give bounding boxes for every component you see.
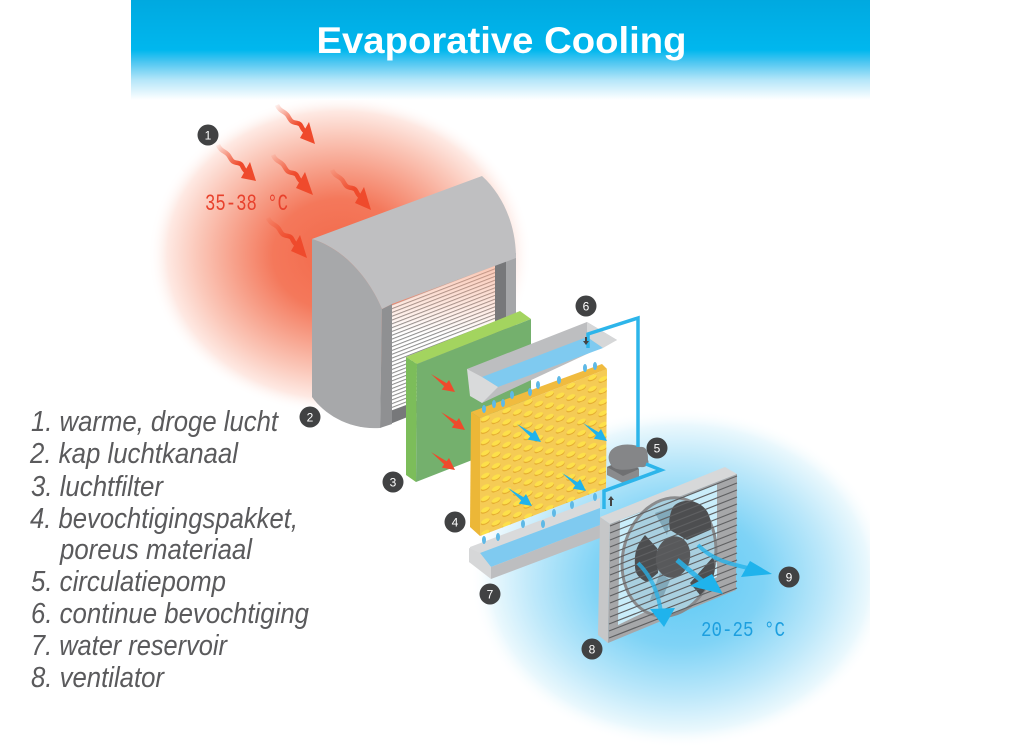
fan blades: [635, 501, 715, 600]
legend list: 6. continue bevochtiging: [31, 598, 309, 630]
fan side face: [598, 517, 610, 643]
hot air arrows: [218, 105, 371, 258]
cool temperature label: 20-25 °C: [701, 620, 785, 643]
water pipes: [588, 318, 661, 509]
legend list: 7. water reservoir: [31, 630, 228, 662]
circulation pump: [607, 444, 649, 483]
red heat glow: [148, 95, 532, 415]
number badges: 1: [205, 128, 212, 142]
blue cool glow: [483, 418, 870, 738]
hood side panel: [312, 239, 382, 428]
small flow marks: [583, 337, 614, 506]
fan ring: [610, 488, 728, 626]
number badges: 2: [307, 410, 314, 424]
legend list: 2. kap luchtkanaal: [29, 438, 239, 470]
hood top panel: [312, 176, 516, 309]
legend list: 4. bevochtigingspakket,: [30, 503, 298, 535]
legend list: 8. ventilator: [31, 662, 165, 694]
fan louvers: [609, 476, 737, 638]
title: Evaporative Cooling: [316, 20, 686, 61]
filter arrows: [431, 374, 455, 392]
fan top face: [600, 467, 737, 524]
number badges: 4: [452, 516, 459, 530]
air duct hood: [312, 176, 516, 428]
number badges: 5: [654, 442, 661, 456]
air filter: [406, 311, 531, 482]
top water trough: [467, 322, 617, 403]
legend list: poreus materiaal: [59, 534, 253, 566]
number badges: 7: [487, 588, 494, 602]
header banner: [131, 0, 870, 100]
fan unit: [598, 467, 772, 643]
hood louvers: [392, 265, 495, 420]
fan opening: [618, 484, 717, 625]
hood back frame: [490, 253, 516, 410]
hot temperature label: 35-38 °C: [205, 191, 288, 217]
water drops upper: [482, 362, 597, 413]
number badges: 8: [589, 642, 596, 656]
number badges: 6: [583, 300, 590, 314]
legend list: [29, 406, 309, 694]
humidifying pad: [470, 362, 607, 536]
water drops lower: [482, 493, 597, 544]
legend list: 3. luchtfilter: [31, 471, 164, 503]
lower water reservoir: [469, 493, 600, 579]
pad arrows: [517, 424, 541, 442]
number badges: 3: [390, 476, 397, 490]
fan front face: [608, 474, 737, 643]
number badges: [198, 124, 800, 660]
number badges: 9: [786, 570, 793, 584]
legend list: 1. warme, droge lucht: [31, 406, 280, 438]
fan air arrows: [638, 545, 772, 627]
legend list: 5. circulatiepomp: [31, 566, 226, 598]
